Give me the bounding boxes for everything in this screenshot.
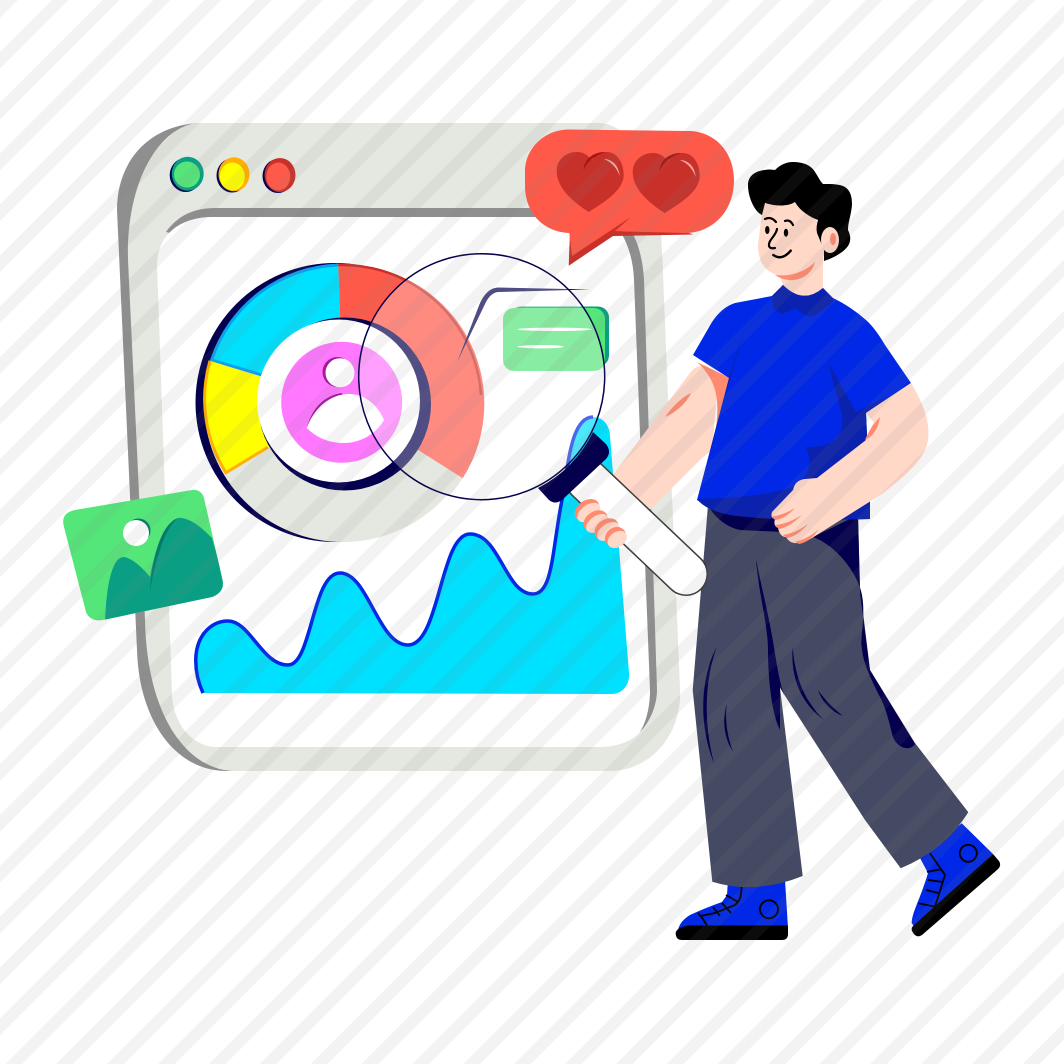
lens [358,253,606,500]
segment: yellow [205,361,343,473]
segment: cyan [212,265,343,403]
area chart [196,417,629,694]
speech callout with green note [457,288,609,371]
donut chart [196,263,484,542]
speech bubble with hearts [525,129,734,266]
icon: user avatar [281,342,402,463]
icon: heart [557,152,624,212]
magnifying glass [343,254,686,574]
shoe: right [912,823,1000,936]
icon: heart [633,153,700,213]
ear [821,227,839,253]
head [748,162,852,280]
icon: photo card [63,490,235,622]
face details [765,218,793,257]
arm and hand on hip [771,383,928,544]
person [676,162,1000,940]
segment: red [338,265,484,478]
fingers gripping the handle [570,494,631,552]
arm holding the magnifier [612,362,730,530]
neck [778,250,823,296]
panel: browser window [117,123,680,771]
window buttons [170,157,296,193]
hair [748,162,852,261]
trousers [693,505,968,887]
shoe: left [676,880,788,940]
shirt [693,285,911,520]
handle cap [538,432,609,502]
handle [587,480,686,574]
